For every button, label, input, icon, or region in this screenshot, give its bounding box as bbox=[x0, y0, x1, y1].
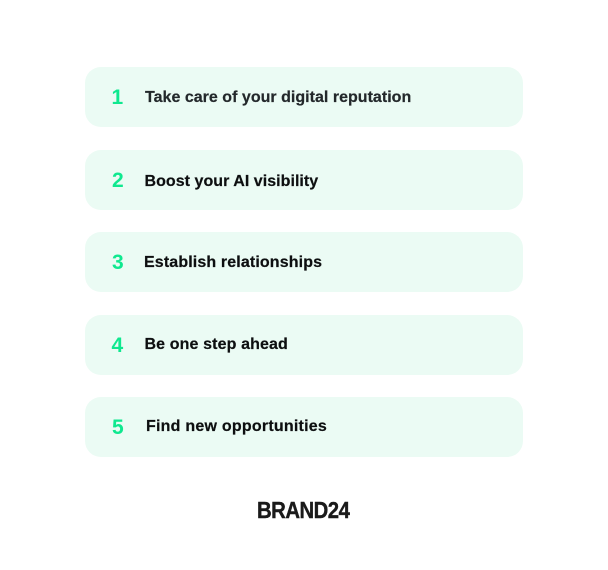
text: item 2: Boost your AI visibility bbox=[144, 172, 318, 190]
text: item 3: Establish relationships bbox=[144, 254, 322, 270]
text: item 5: Find new opportunities bbox=[146, 418, 327, 435]
panel: item 2 bbox=[85, 150, 523, 210]
panel: item 3 bbox=[85, 232, 523, 292]
number 1: 1 bbox=[112, 86, 123, 109]
panel: item 1 bbox=[85, 67, 523, 127]
panel: item 4 bbox=[85, 315, 523, 375]
number 5: 5 bbox=[112, 416, 124, 439]
number 4: 4 bbox=[112, 334, 123, 357]
number 3: 3 bbox=[112, 251, 124, 274]
panel: item 5 bbox=[85, 397, 523, 457]
number 2: 2 bbox=[112, 169, 124, 192]
logo: BRAND24: BRAND24 bbox=[257, 497, 349, 523]
text: item 4: Be one step ahead bbox=[144, 336, 288, 353]
text: item 1: Take care of your digital reputation bbox=[145, 89, 411, 106]
